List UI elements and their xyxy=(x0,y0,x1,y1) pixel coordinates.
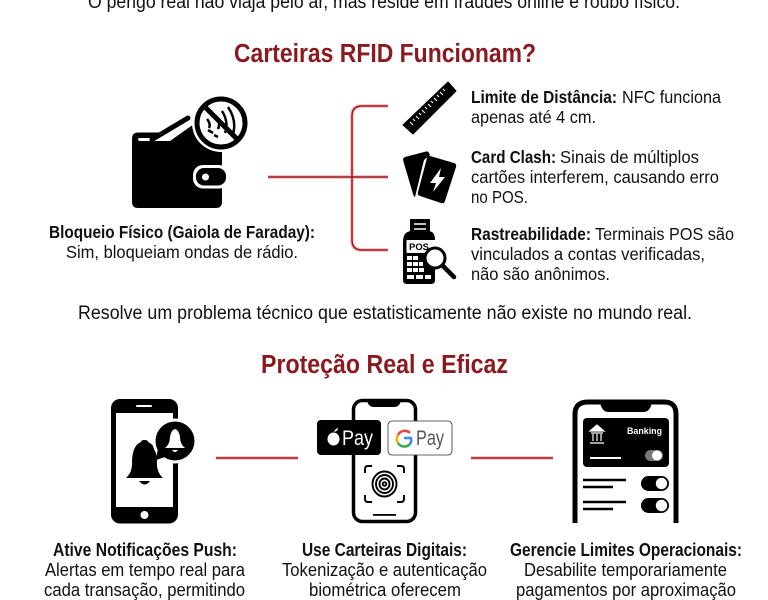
text: card clash: no POS. xyxy=(471,187,528,207)
text: digital wallets: Tokenização e autenticação xyxy=(282,560,487,580)
icon: phone with banking limits xyxy=(575,401,676,523)
heading: RFID wallets: Carteiras RFID Funcionam? xyxy=(234,40,536,68)
text: digital wallets xyxy=(282,540,487,600)
banking card: Banking xyxy=(627,426,662,437)
arrow: connector one xyxy=(216,456,298,460)
text: distance limit: NFC funciona xyxy=(622,87,721,107)
text: traceability: vinculados a contas verificadas, xyxy=(471,244,705,264)
badge: Apple Pay: Pay xyxy=(342,427,373,450)
icon: phone with digital wallets xyxy=(317,400,452,522)
text: card clash xyxy=(471,147,719,207)
icon: clashing cards xyxy=(403,151,456,203)
badge: Google Pay: Pay xyxy=(416,427,444,450)
connector: red bracket xyxy=(268,106,388,250)
icon: POS terminal with magnifier: POS xyxy=(409,242,429,252)
text: distance limit: apenas até 4 cm. xyxy=(471,107,596,127)
text: traceability: Terminais POS são xyxy=(595,224,734,244)
icon: ruler xyxy=(403,82,456,134)
caption: physical blocking: Sim, bloqueiam ondas de rádio. xyxy=(66,242,298,262)
text: digital wallets: biométrica oferecem xyxy=(309,580,461,600)
conclusion text: Resolve um problema técnico que estatisticamente não existe no mundo real. xyxy=(78,303,692,324)
heading: real protection: Proteção Real e Eficaz xyxy=(261,351,508,379)
icon: phone with notification bells xyxy=(111,399,198,524)
text: operational limits: Desabilite temporariamente xyxy=(524,560,727,580)
caption: physical blocking: Bloqueio Físico (Gaiola de Faraday): xyxy=(49,222,315,242)
arrow: connector two xyxy=(471,456,553,460)
limit toggles xyxy=(583,476,669,513)
text: distance limit: Limite de Distância: xyxy=(471,87,617,107)
text: digital wallets: Use Carteiras Digitais: xyxy=(302,540,467,560)
text: push notifications xyxy=(44,540,246,600)
caption: physical blocking xyxy=(49,222,315,262)
text: distance limit xyxy=(471,87,721,127)
text: operational limits xyxy=(510,540,742,600)
text: traceability: não são anônimos. xyxy=(471,264,610,284)
text: traceability: Rastreabilidade: xyxy=(471,224,591,244)
text: card clash: cartões interferem, causando erro xyxy=(471,167,719,187)
icon: POS terminal with magnifier xyxy=(403,219,454,284)
text: push notifications: Ative Notificações Push: xyxy=(53,540,237,560)
text: operational limits: pagamentos por aproximação xyxy=(516,580,736,600)
icon: fingerprint xyxy=(365,466,404,502)
icon: wallet with blocked signal xyxy=(132,94,250,208)
text: push notifications: Alertas em tempo real para xyxy=(45,560,246,580)
text: card clash: Sinais de múltiplos xyxy=(560,147,699,167)
text: push notifications: cada transação, permitindo xyxy=(44,580,245,600)
text: card clash: Card Clash: xyxy=(471,147,556,167)
text: traceability xyxy=(471,224,734,284)
